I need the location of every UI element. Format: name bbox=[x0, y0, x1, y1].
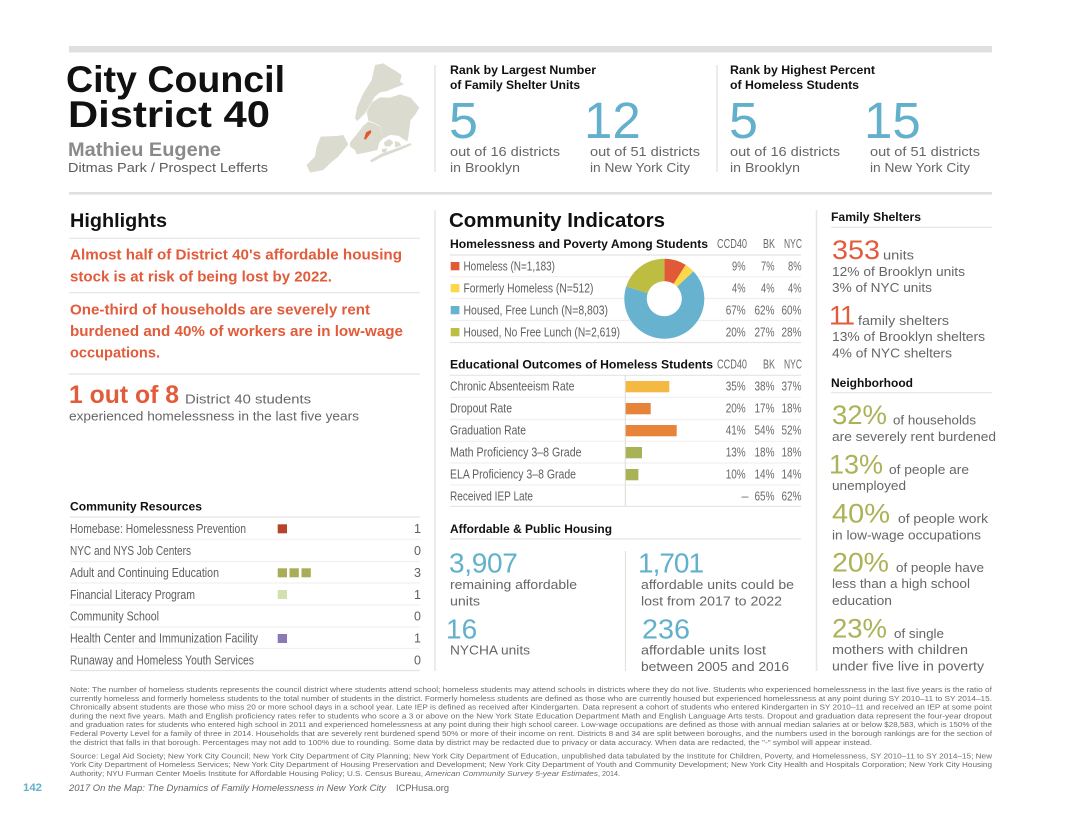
stat: units could be lost: affordable units could be bbox=[641, 577, 794, 592]
row: Homebase: Homebase: Homelessness Prevention bbox=[70, 522, 246, 536]
stat: single mothers: of single bbox=[894, 626, 944, 641]
row: Job Centers: 0 bbox=[414, 544, 421, 558]
row: Chronic Absenteeism bbox=[450, 380, 802, 394]
row: ELA Proficiency: 14% bbox=[782, 468, 802, 482]
row: Housed, No Free Lunch: Housed, No Free Lunch (N=2,619) bbox=[464, 326, 620, 340]
heading with column labels: Homelessness and Poverty Among Students bbox=[450, 239, 708, 251]
row: Chronic Absenteeism: Chronic Absenteeism Rate bbox=[450, 380, 575, 394]
heading with column labels: BK bbox=[763, 358, 775, 372]
row: Graduation bbox=[450, 424, 802, 438]
row: Health Center: 1 bbox=[414, 632, 421, 646]
row: Financial Literacy: 1 bbox=[414, 588, 421, 602]
row: Chronic Absenteeism: 38% bbox=[754, 380, 774, 394]
stat: rent burdened: 32% bbox=[832, 400, 887, 430]
row: Homeless bbox=[451, 260, 802, 274]
row: Graduation: Graduation Rate bbox=[450, 424, 526, 438]
stat: single mothers: under five live in poverty bbox=[832, 658, 985, 674]
row: Housed, Free Lunch bbox=[451, 304, 802, 318]
stat: family shelters bbox=[829, 301, 986, 360]
note text block: the district that falls in that borough. Percentages may not add to 100% due to rounding. Some data by district may be redacted due to privacy or data accuracy. When data are redacted, the "-" symbol will appear instead. bbox=[70, 738, 872, 747]
panel: family shelters bbox=[829, 212, 992, 360]
row: Chronic Absenteeism: 37% bbox=[782, 380, 802, 394]
source text block: American Community Survey 5-year Estimates bbox=[424, 769, 598, 778]
row: Housed, Free Lunch: Housed, Free Lunch (N=8,803) bbox=[464, 304, 608, 318]
stat: remaining affordable units bbox=[449, 548, 577, 609]
heading: Highlights bbox=[70, 210, 167, 232]
stat: family shelters: family shelters bbox=[858, 313, 950, 328]
stat: NYC rank: out of 51 districts bbox=[870, 144, 981, 159]
heading with column labels: NYC bbox=[784, 237, 802, 251]
stat: Brooklyn rank: out of 16 districts bbox=[450, 144, 561, 159]
stat: family shelters: 11 bbox=[829, 301, 854, 331]
row: Dropout: 18% bbox=[782, 402, 802, 416]
stat: shelter units: 3% of NYC units bbox=[832, 280, 933, 295]
row: Financial Literacy bbox=[70, 588, 421, 602]
stat: low-wage: in low-wage occupations bbox=[832, 527, 982, 542]
panel: educational outcomes of homeless students bbox=[450, 358, 802, 506]
council member and neighborhoods: Ditmas Park / Prospect Lefferts bbox=[68, 160, 269, 175]
stat: NYCHA units: 16 bbox=[446, 613, 477, 644]
stat: shelter units bbox=[832, 235, 966, 295]
row: Math Proficiency: 18% bbox=[754, 446, 774, 460]
heading with column labels: CCD40 bbox=[717, 358, 747, 372]
icon: NYC map with district highlighted bbox=[307, 63, 419, 173]
note text block: during the next five years. Math and English proficiency rates refer to students who score a 3 or above on the New York State Education Department Math and English Language Arts tests. Dropout and graduation data represent the four-year dropout bbox=[70, 711, 993, 720]
stat: low-wage: 40% bbox=[832, 499, 890, 529]
note text block: and graduation rates for students who entered high school in 2011 and experienced homelessness at any point during their high school career. Low-wage occupations are defined as those with annual median salaries at or below $28,583, which is 150% of the bbox=[70, 720, 992, 729]
stat: family shelters: 4% of NYC shelters bbox=[832, 345, 953, 360]
row: Adult Education: 3 bbox=[414, 566, 421, 580]
stat: Brooklyn rank: 5 bbox=[729, 92, 758, 149]
row: Health Center bbox=[70, 632, 421, 646]
stat: Brooklyn rank bbox=[729, 92, 841, 175]
stat: low-wage: of people work bbox=[898, 511, 989, 526]
row: Homeless: Homeless (N=1,183) bbox=[464, 260, 555, 274]
note text block: Federal Poverty Level for a family of three in 2014. Households that are severely rent burdened spend 50% or more of their income on rent. Districts 8 and 34 are split between boroughs, and the numbers used in the borough rankings are for the section of bbox=[70, 729, 993, 738]
panel: community resources bbox=[70, 502, 421, 670]
stat: rent burdened: of households bbox=[893, 413, 977, 428]
stat: NYCHA units bbox=[446, 613, 531, 658]
stat: units could be lost: 1,701 bbox=[638, 548, 703, 579]
row: Formerly Homeless: 4% bbox=[788, 282, 802, 296]
row: Dropout: Dropout Rate bbox=[450, 402, 512, 416]
stat: Brooklyn rank: in Brooklyn bbox=[450, 160, 520, 175]
title bbox=[66, 59, 285, 135]
stat: Brooklyn rank: in Brooklyn bbox=[730, 160, 800, 175]
heading: community indicators: Community Indicators bbox=[449, 210, 665, 232]
stat: 1 out of 8 bbox=[69, 381, 360, 424]
highlight: rent burden: burdened and 40% of workers are in low-wage bbox=[70, 323, 403, 340]
row: Dropout: 20% bbox=[726, 402, 746, 416]
heading with column labels: BK bbox=[763, 237, 775, 251]
row: Homeless: 9% bbox=[732, 260, 746, 274]
row: Math Proficiency bbox=[450, 446, 802, 460]
stat: shelter units: 353 bbox=[832, 235, 880, 265]
stat: education: of people have bbox=[896, 560, 984, 575]
row: Math Proficiency: Math Proficiency 3–8 Grade bbox=[450, 446, 582, 460]
stat: education bbox=[832, 548, 984, 608]
stat: remaining affordable units: remaining affordable bbox=[450, 577, 577, 592]
footer citation: 2017 On the Map: The Dynamics of Family Homelessness in New York City bbox=[68, 783, 387, 794]
row: Homebase bbox=[70, 522, 421, 536]
heading bbox=[730, 65, 875, 92]
stat: education: education bbox=[832, 593, 892, 608]
note text block: Chronically absent students are those who miss 20 or more school days in a school year. Late IEP is defined as received after Kindergarten. Data represent a cohort of students who entered Kindergarten in SY 2010–11 and received an IEP at some point bbox=[70, 703, 993, 712]
heading: Rank by Highest Percent bbox=[730, 65, 875, 77]
stat: shelter units: 12% of Brooklyn units bbox=[832, 264, 966, 279]
stat: single mothers: 23% bbox=[832, 613, 887, 643]
stat: unemployed: unemployed bbox=[832, 478, 906, 493]
row: Runaway Services: 0 bbox=[414, 654, 421, 668]
stat: single mothers: mothers with children bbox=[832, 642, 968, 657]
row: Runaway Services: Runaway and Homeless Youth Services bbox=[70, 654, 254, 668]
page number: 142 bbox=[23, 782, 42, 794]
highlight: affordable housing: Almost half of District 40's affordable housing bbox=[70, 246, 402, 264]
stat: single mothers bbox=[832, 613, 985, 674]
stat: units could be lost: lost from 2017 to 2022 bbox=[641, 594, 782, 609]
stat: education: 20% bbox=[832, 548, 889, 578]
stat: NYC rank: in New York City bbox=[870, 160, 971, 175]
row: Formerly Homeless: 4% bbox=[761, 282, 774, 296]
row: Housed, No Free Lunch: 28% bbox=[782, 326, 802, 340]
heading with column labels bbox=[450, 358, 802, 372]
source text block: , 2014. bbox=[598, 769, 620, 778]
highlight: affordable housing bbox=[70, 246, 402, 286]
row: Received IEP Late: 65% bbox=[754, 490, 774, 504]
row: ELA Proficiency: 14% bbox=[754, 468, 774, 482]
highlight: rent burden bbox=[70, 301, 403, 361]
row: Housed, No Free Lunch: 27% bbox=[754, 326, 774, 340]
row: Homeless: 8% bbox=[788, 260, 802, 274]
row: Homeless: 7% bbox=[761, 260, 774, 274]
stat: units lost bbox=[641, 613, 789, 674]
heading with column labels: NYC bbox=[784, 358, 802, 372]
row: Housed, Free Lunch: 62% bbox=[754, 304, 774, 318]
row: Formerly Homeless: 4% bbox=[732, 282, 746, 296]
row: Community School bbox=[70, 610, 421, 624]
source text block: York City Department of Homeless Services; New York City Department of Housing Preservation and Development; New York City Department of Youth and Community Development; New York City Health and Hospitals Corporation; New York City Housing bbox=[70, 760, 992, 769]
panel: neighborhood bbox=[829, 378, 996, 674]
source text block: Source: Legal Aid Society; New York City Council; New York City Department of City Planning; New York City Department of Education, unpublished data tabulated by the Institute for Children, Poverty, and Homelessness, SY 2010–11 to SY 2014–15; New bbox=[70, 752, 993, 760]
row: Homebase: 1 bbox=[414, 522, 421, 536]
stat: NYC rank bbox=[584, 92, 701, 175]
panel: rank by homeless students bbox=[729, 65, 981, 175]
stat: rent burdened bbox=[832, 400, 996, 444]
row: Housed, No Free Lunch bbox=[451, 326, 802, 340]
stat: units lost: 236 bbox=[642, 613, 690, 644]
stat: rent burdened: are severely rent burdened bbox=[832, 429, 996, 444]
stat: education: less than a high school bbox=[832, 576, 970, 591]
panel: affordable and public housing bbox=[446, 524, 801, 674]
highlight: affordable housing: stock is at risk of being lost by 2022. bbox=[70, 269, 332, 286]
heading: Neighborhood bbox=[831, 378, 913, 390]
row: Adult Education bbox=[70, 566, 421, 580]
source text block bbox=[70, 752, 993, 778]
stat: 1 out of 8: District 40 students bbox=[185, 392, 312, 406]
row: Community School: 0 bbox=[414, 610, 421, 624]
title: District 40 bbox=[68, 94, 270, 135]
heading: Rank by Largest Number bbox=[450, 65, 597, 77]
row: Health Center: Health Center and Immunization Facility bbox=[70, 632, 259, 646]
row: Adult Education: Adult and Continuing Education bbox=[70, 566, 219, 580]
row: Math Proficiency: 13% bbox=[726, 446, 746, 460]
stat: units could be lost bbox=[638, 548, 794, 609]
row: Financial Literacy: Financial Literacy Program bbox=[70, 588, 195, 602]
row: Graduation: 52% bbox=[782, 424, 802, 438]
panel: rank by family shelter units bbox=[449, 65, 701, 175]
heading: Affordable & Public Housing bbox=[450, 524, 612, 536]
row: Received IEP Late: 62% bbox=[782, 490, 802, 504]
stat: Brooklyn rank: out of 16 districts bbox=[730, 144, 841, 159]
row: Graduation: 41% bbox=[726, 424, 746, 438]
stat: 1 out of 8: 1 out of 8 bbox=[69, 381, 179, 409]
stat: units lost: affordable units lost bbox=[641, 643, 766, 658]
heading: Family Shelters bbox=[831, 212, 921, 224]
stat: NYCHA units: NYCHA units bbox=[450, 643, 531, 658]
row: Formerly Homeless: Formerly Homeless (N=512) bbox=[464, 282, 594, 296]
stat: unemployed: 13% bbox=[829, 449, 883, 479]
row: ELA Proficiency: 10% bbox=[726, 468, 746, 482]
row: Chronic Absenteeism: 35% bbox=[726, 380, 746, 394]
highlight: rent burden: One-third of households are severely rent bbox=[70, 301, 370, 318]
stat: Brooklyn rank bbox=[449, 92, 561, 175]
row: ELA Proficiency: ELA Proficiency 3–8 Grade bbox=[450, 468, 576, 482]
row: Received IEP Late: – bbox=[742, 490, 748, 504]
row: Graduation: 54% bbox=[754, 424, 774, 438]
source text block: Authority; NYU Furman Center Moelis Institute for Affordable Housing Policy; U.S. Census Bureau, bbox=[70, 769, 423, 778]
stat: family shelters: 13% of Brooklyn shelters bbox=[832, 329, 986, 344]
stat: NYC rank: 12 bbox=[584, 92, 641, 149]
stat: NYC rank: out of 51 districts bbox=[590, 144, 701, 159]
note text block: currently homeless and formerly homeless students to the total number of students in the district. Formerly homeless students are defined as those who are currently housed but experienced homelessness at any point during SY 2010–11 to SY 2014–15. bbox=[70, 694, 992, 703]
row: Runaway Services bbox=[70, 654, 421, 668]
footer citation: ICPHusa.org bbox=[396, 783, 449, 794]
heading: of Homeless Students bbox=[730, 80, 859, 92]
row: Community School: Community School bbox=[70, 610, 159, 624]
heading: Community Resources bbox=[70, 502, 202, 514]
row: Dropout bbox=[450, 402, 802, 416]
highlight: rent burden: occupations. bbox=[70, 344, 160, 361]
row: Received IEP Late bbox=[450, 490, 802, 504]
row: Housed, Free Lunch: 67% bbox=[726, 304, 746, 318]
row: ELA Proficiency bbox=[450, 468, 802, 482]
panel: highlights bbox=[69, 210, 420, 424]
title: City Council bbox=[66, 59, 285, 100]
stat: 1 out of 8: experienced homelessness in the last five years bbox=[69, 409, 360, 424]
heading bbox=[450, 65, 597, 92]
note text block: Note: The number of homeless students represents the council district where students attend school; homeless students may attend schools in districts where they do not live. Students who experienced homelessness in the last five years is the ratio of bbox=[70, 685, 993, 694]
row: Job Centers: NYC and NYS Job Centers bbox=[70, 544, 191, 558]
stat: unemployed bbox=[829, 449, 969, 493]
stat: Brooklyn rank: 5 bbox=[449, 92, 478, 149]
row: Housed, Free Lunch: 60% bbox=[782, 304, 802, 318]
panel: homelessness and poverty among students bbox=[450, 237, 802, 342]
council member and neighborhoods: Mathieu Eugene bbox=[68, 139, 221, 161]
row: Job Centers bbox=[70, 544, 421, 558]
stat: NYC rank: 15 bbox=[864, 92, 921, 149]
heading with column labels bbox=[450, 237, 802, 251]
stat: NYC rank: in New York City bbox=[590, 160, 691, 175]
note text block bbox=[70, 685, 993, 747]
donut chart bbox=[624, 259, 704, 339]
heading: of Family Shelter Units bbox=[450, 80, 580, 92]
stat: low-wage bbox=[832, 499, 989, 542]
stat: units lost: between 2005 and 2016 bbox=[641, 659, 789, 674]
row: Formerly Homeless bbox=[451, 282, 802, 296]
council member and neighborhoods bbox=[68, 139, 269, 175]
stat: remaining affordable units: 3,907 bbox=[449, 548, 518, 579]
heading with column labels: CCD40 bbox=[717, 237, 747, 251]
stat: remaining affordable units: units bbox=[450, 594, 481, 609]
row: Received IEP Late: Received IEP Late bbox=[450, 490, 533, 504]
row: Housed, No Free Lunch: 20% bbox=[726, 326, 746, 340]
row: Dropout: 17% bbox=[754, 402, 774, 416]
stat: unemployed: of people are bbox=[889, 462, 969, 477]
heading with column labels: Educational Outcomes of Homeless Students bbox=[450, 360, 713, 372]
row: Math Proficiency: 18% bbox=[782, 446, 802, 460]
stat: shelter units: units bbox=[883, 248, 915, 262]
stat: NYC rank bbox=[864, 92, 981, 175]
